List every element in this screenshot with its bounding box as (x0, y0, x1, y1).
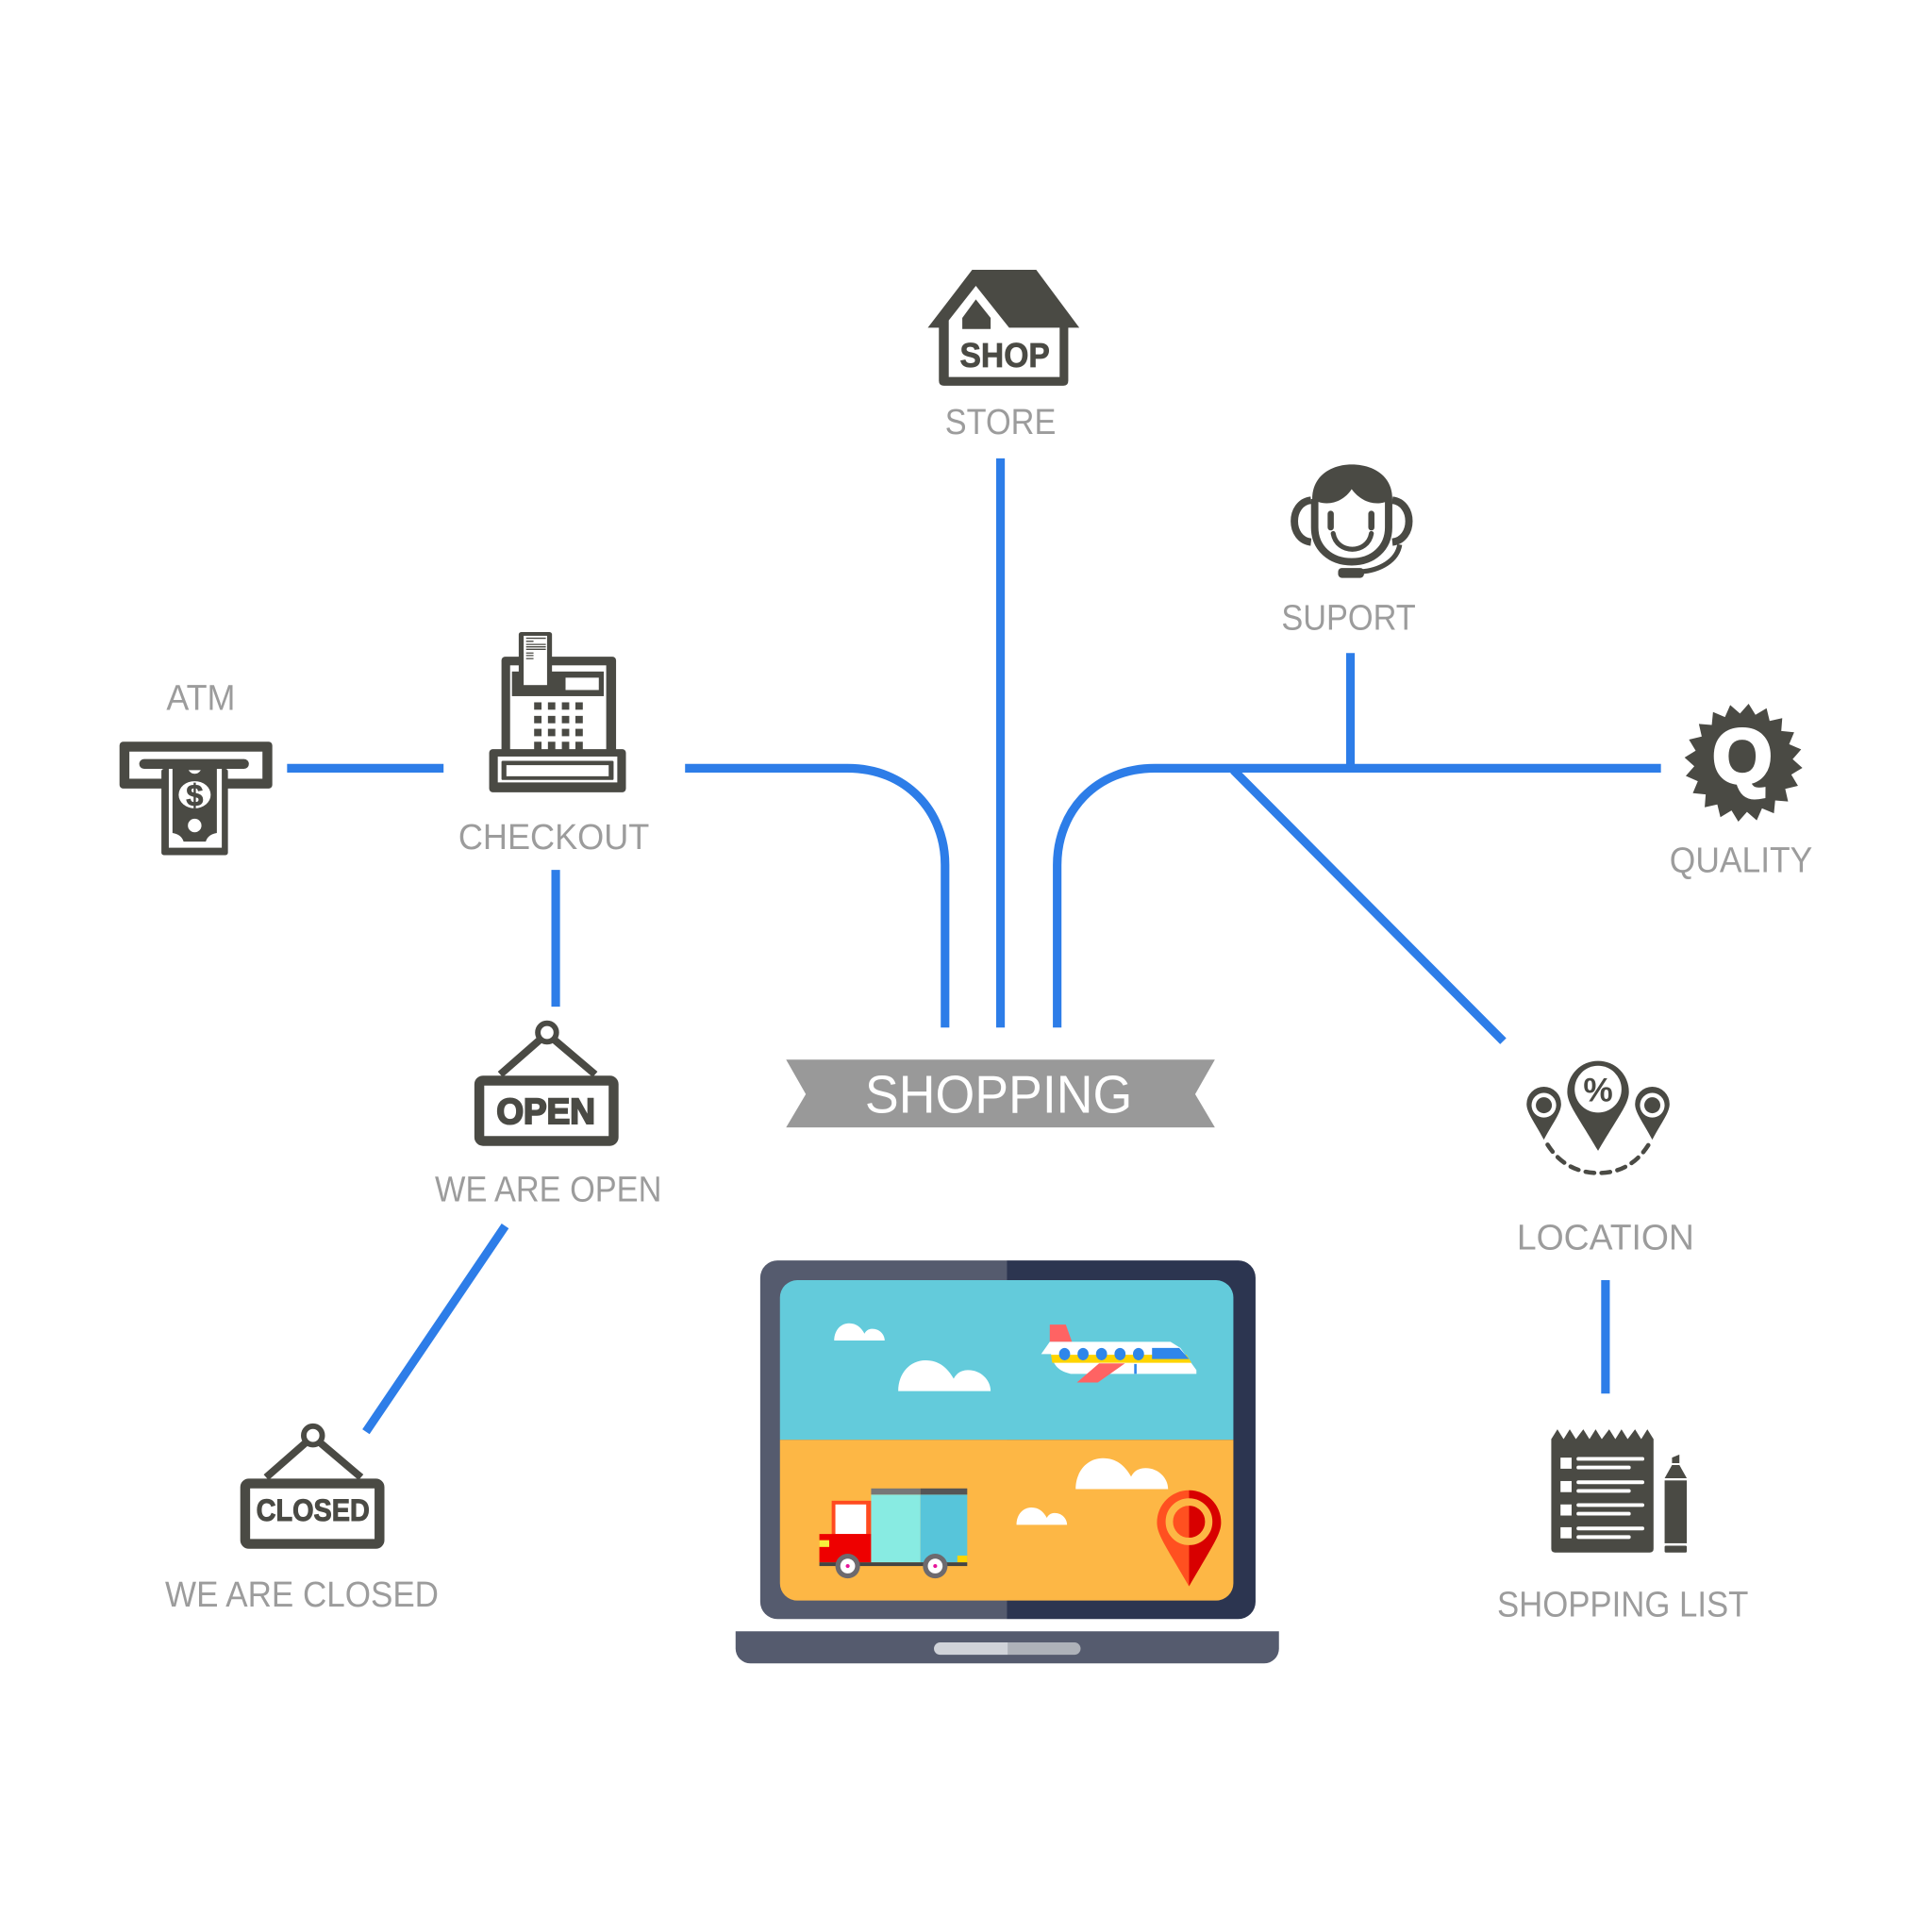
sky (780, 1280, 1233, 1440)
banner: shopping (786, 1059, 1215, 1127)
connector: location to shopping list (1602, 1280, 1608, 1393)
label: quality: QUALITY (1670, 841, 1812, 881)
icon: open sign: OPEN (496, 1092, 595, 1132)
cloud (898, 1360, 991, 1391)
cloud (834, 1324, 885, 1341)
ground (780, 1440, 1233, 1601)
connector: store to shopping (997, 458, 1004, 1027)
connector: shopping to quality (1058, 768, 1661, 1027)
label: we are open: WE ARE OPEN (435, 1170, 661, 1209)
connector: open to closed (366, 1226, 506, 1432)
cloud (1017, 1507, 1067, 1524)
icon: ATM cash: $ (186, 777, 203, 812)
delivery truck (820, 1489, 967, 1578)
trackpad (934, 1642, 1080, 1655)
connector: checkout to open (553, 870, 559, 1007)
label: support: SUPORT (1281, 598, 1416, 638)
connector: location branch (1233, 770, 1503, 1041)
icon: shop store: SHOP (959, 336, 1050, 375)
cloud (1075, 1458, 1168, 1489)
icon: cash register (490, 632, 626, 792)
icon: location pins (1526, 1061, 1670, 1173)
icon: support agent (1294, 464, 1409, 578)
label: location: LOCATION (1517, 1218, 1694, 1257)
label: store: STORE (945, 403, 1056, 442)
label: we are closed: WE ARE CLOSED (165, 1575, 439, 1615)
icon: open sign (479, 1024, 613, 1141)
airplane (1041, 1324, 1196, 1382)
icon: ATM cash (120, 741, 273, 855)
label: ATM: ATM (166, 678, 235, 718)
icon: quality badge: Q (1712, 714, 1772, 799)
laptop bezel (760, 1260, 1256, 1619)
icon: shopping list (1551, 1429, 1687, 1553)
icon: closed sign (245, 1426, 379, 1544)
connector: support branch (1347, 653, 1354, 768)
connector: ATM to checkout (287, 765, 443, 772)
label: checkout: CHECKOUT (458, 818, 649, 858)
label: shopping list: SHOPPING LIST (1497, 1586, 1748, 1625)
icon: closed sign: CLOSED (257, 1492, 370, 1527)
map pin (1157, 1491, 1221, 1587)
icon: location pins: % (1583, 1073, 1613, 1109)
banner: shopping: SHOPPING (865, 1064, 1132, 1124)
laptop illustration (736, 1260, 1279, 1663)
laptop base (736, 1631, 1279, 1663)
icon: shop store (928, 270, 1079, 386)
connector: checkout to shopping (685, 768, 945, 1027)
icon: quality badge (1679, 699, 1807, 826)
